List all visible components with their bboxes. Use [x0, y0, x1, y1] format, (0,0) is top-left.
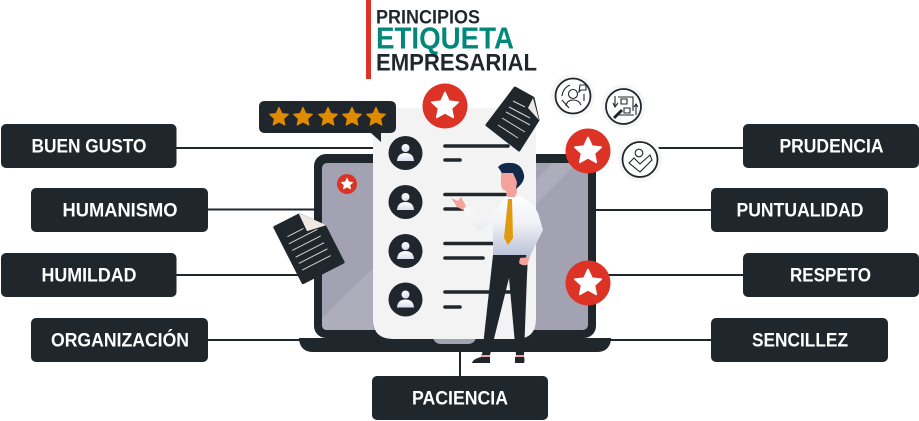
icon: round badge approval — [618, 138, 662, 182]
businessman figure — [451, 163, 543, 363]
label: prudencia — [743, 124, 919, 168]
hair — [498, 163, 524, 189]
label: humanismo — [31, 188, 208, 232]
label: humildad — [1, 253, 176, 297]
icon: small star badge on screen — [337, 174, 357, 194]
label: humildad: HUMILDAD — [42, 266, 136, 286]
screen highlight lower left — [322, 268, 373, 330]
profile row 3 — [388, 234, 495, 268]
label: buen gusto — [1, 124, 176, 168]
label: puntualidad — [711, 188, 888, 232]
profile row 2 — [388, 185, 505, 219]
laptop — [299, 154, 611, 352]
title accent bar — [366, 0, 371, 79]
title line: etiqueta: ETIQUETA — [376, 20, 514, 56]
label: humanismo: HUMANISMO — [62, 200, 178, 222]
label: buen gusto: BUEN GUSTO — [32, 136, 146, 158]
rating bubble with stars — [259, 101, 396, 142]
label: sencillez — [711, 318, 888, 362]
title line: empresarial: EMPRESARIAL — [376, 50, 537, 76]
label: respeto: RESPETO — [790, 266, 871, 286]
screen highlight upper right — [536, 163, 577, 204]
shirt and arms — [463, 196, 543, 258]
hand and wrist — [451, 197, 466, 210]
label: puntualidad: PUNTUALIDAD — [736, 200, 864, 222]
icon: round badge people — [551, 74, 595, 118]
label: paciencia — [372, 376, 548, 420]
label: organización: ORGANIZACIÓN — [51, 330, 189, 352]
panel: rating card — [373, 108, 536, 339]
tie — [504, 199, 513, 245]
icon: round badge plan — [602, 84, 646, 128]
laptop notch — [433, 338, 476, 344]
connector lines — [176, 148, 743, 376]
laptop screen — [322, 163, 588, 330]
trousers — [482, 255, 528, 355]
icon: star badge right — [566, 260, 610, 306]
label: organización — [31, 318, 208, 362]
face and neck — [501, 172, 517, 197]
label: paciencia: PACIENCIA — [412, 388, 508, 410]
label: prudencia: PRUDENCIA — [780, 136, 884, 158]
icon: document left — [274, 204, 345, 283]
profile row 1 — [388, 136, 508, 170]
laptop frame — [314, 154, 596, 338]
title block — [366, 0, 537, 79]
icon: document top right — [487, 88, 539, 150]
title line: principios: PRINCIPIOS — [376, 6, 480, 28]
icon: star badge top right — [566, 128, 610, 174]
laptop base — [299, 338, 611, 352]
icon: large star badge on card — [422, 84, 468, 128]
profile row 4 — [388, 282, 510, 316]
shoes — [472, 357, 524, 363]
label: respeto — [743, 253, 919, 297]
label: sencillez: SENCILLEZ — [752, 330, 848, 352]
